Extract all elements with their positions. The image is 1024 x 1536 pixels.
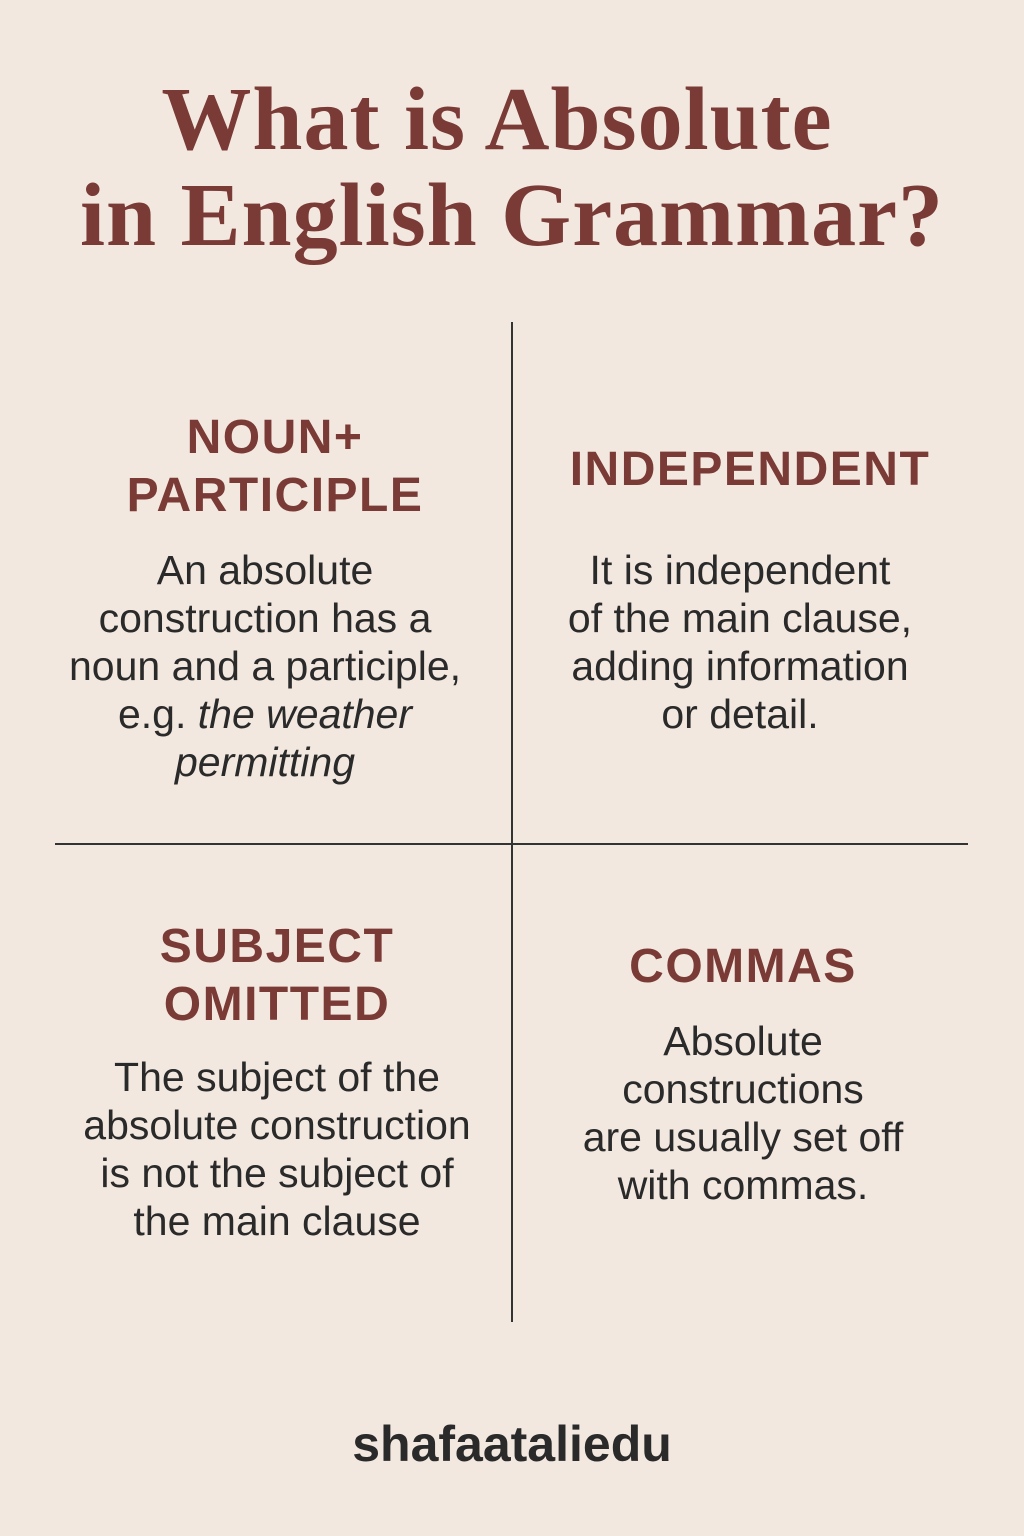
- heading: noun+participle: PARTICIPLE: [127, 469, 423, 522]
- heading: noun+participle: NOUN+: [187, 411, 363, 464]
- text: independent: or detail.: [661, 691, 819, 737]
- text: commas: constructions: [622, 1066, 864, 1112]
- text: noun+participle: noun and a participle,: [69, 643, 461, 689]
- text: subject omitted: The subject of the: [114, 1054, 440, 1100]
- footer: shafaataliedu: [352, 1416, 672, 1472]
- text: subject omitted: the main clause: [133, 1198, 421, 1244]
- heading: noun+participle: [127, 411, 423, 522]
- panel: commas: [583, 940, 904, 1208]
- text: independent: [568, 547, 912, 737]
- text: subject omitted: [83, 1054, 471, 1244]
- heading: commas: COMMAS: [629, 940, 857, 993]
- text: noun+participle: [69, 547, 461, 785]
- heading: subject omitted: [160, 920, 394, 1031]
- text: independent: adding information: [571, 643, 909, 689]
- text: commas: are usually set off: [583, 1114, 903, 1160]
- text: commas: Absolute: [663, 1018, 823, 1064]
- panel: subject omitted: [83, 920, 471, 1244]
- title: [80, 70, 944, 265]
- heading: independent: INDEPENDENT: [570, 443, 930, 496]
- heading: subject omitted: SUBJECT: [160, 920, 394, 973]
- text: independent: It is independent: [590, 547, 890, 593]
- text: independent: of the main clause,: [568, 595, 912, 641]
- text: noun+participle: An absolute: [157, 547, 373, 593]
- text: commas: [583, 1018, 904, 1208]
- text: noun+participle: e.g. the weather: [118, 691, 412, 737]
- panel: independent: [568, 443, 930, 737]
- panel: noun+participle: [69, 411, 461, 785]
- title: What is Absolute: [161, 70, 833, 169]
- text: noun+participle: construction has a: [99, 595, 431, 641]
- text: commas: with commas.: [618, 1162, 868, 1208]
- text: subject omitted: is not the subject of: [100, 1150, 454, 1196]
- text: subject omitted: absolute construction: [83, 1102, 471, 1148]
- title: in English Grammar?: [80, 166, 944, 265]
- heading: subject omitted: OMITTED: [164, 978, 390, 1031]
- text: noun+participle: permitting: [175, 739, 355, 785]
